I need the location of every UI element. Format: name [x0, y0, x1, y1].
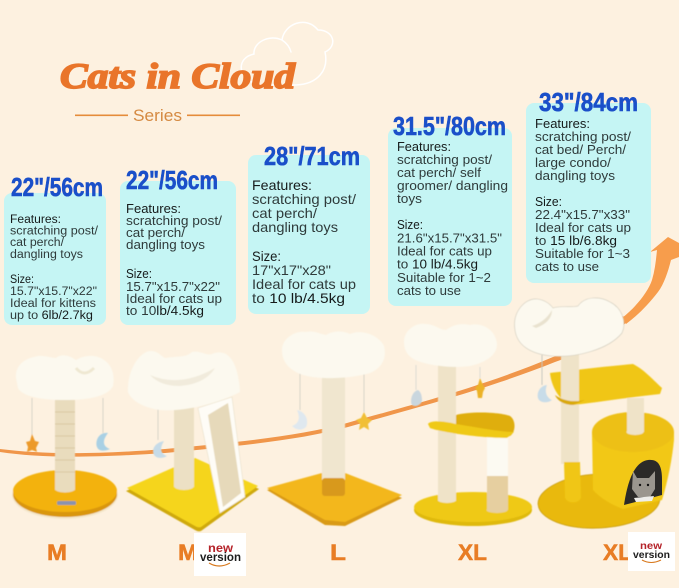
features and size text: toys [397, 192, 422, 206]
product: M round base cat tree [12, 355, 118, 519]
features and size text: 15.7"x15.7"x22" [126, 280, 220, 294]
heading: 22"/56cm [126, 165, 218, 195]
badge: new version: version [200, 552, 241, 564]
subtitle: series: Series [133, 106, 182, 125]
features and size text: Features: [10, 214, 61, 226]
icon: cloud outline behind title [241, 22, 333, 85]
features and size text: Ideal for cats up [397, 244, 492, 258]
size label: M: M [47, 540, 67, 565]
features and size text: Ideal for cats up [126, 292, 222, 306]
features and size text: Size: [535, 195, 562, 209]
features and size text: 21.6"x15.7"x31.5" [397, 232, 502, 246]
features and size text [397, 140, 508, 298]
features and size text: Suitable for 1~2 [397, 271, 491, 285]
size label: M with badge: M [178, 540, 198, 565]
features and size text: Features: [397, 140, 451, 154]
size label: XL: XL [458, 540, 487, 565]
features and size text: Features: [126, 202, 181, 216]
features and size text [10, 214, 99, 322]
growth arrow curve [0, 237, 679, 457]
product: XL condo cat tree [515, 298, 674, 531]
badge: new version: version [633, 549, 670, 561]
features and size text: cats to use [535, 260, 599, 274]
features and size text: dangling toys [10, 249, 83, 261]
heading: 31.5"/80cm [393, 111, 506, 141]
features and size text: cat perch/ [126, 226, 186, 240]
badge: new version: new [640, 540, 663, 552]
features and size text: dangling toys [126, 238, 205, 252]
features and size text: dangling toys [252, 219, 338, 235]
features and size text: Features: [535, 117, 590, 131]
features and size text: Size: [126, 267, 152, 281]
features and size text: to 10 lb/4.5kg [252, 290, 345, 306]
badge: new version [628, 532, 675, 571]
product: M square base cat tree with ramp [126, 351, 259, 531]
product: XL shelf cat tree [404, 324, 532, 526]
features and size text [535, 117, 632, 274]
icon: condo door with kitten [624, 460, 662, 505]
features and size text: scratching post/ [535, 130, 632, 144]
size label: L: L [330, 540, 346, 565]
features and size text: to 10lb/4.5kg [126, 304, 204, 318]
product: L square base cat tree [267, 331, 402, 526]
features and size text: cat perch/ self [397, 166, 482, 180]
size label: XL with badge: XL [603, 540, 632, 565]
features and size text [252, 177, 356, 306]
badge: new version [194, 533, 246, 576]
features and size text: large condo/ [535, 156, 612, 170]
features and size text: to 10 lb/4.5kg [397, 258, 478, 272]
features and size text: up to 6lb/2.7kg [10, 310, 93, 322]
features and size text: scratching post/ [10, 226, 99, 238]
features and size text: Suitable for 1~3 [535, 247, 630, 261]
title: Cats in Cloud [60, 56, 296, 96]
features and size text: cats to use [397, 284, 461, 298]
features and size text: groomer/ dangling [397, 179, 508, 193]
heading: 22"/56cm [11, 172, 103, 202]
panel: 28in L tree [248, 141, 370, 314]
features and size text: Ideal for cats up [535, 221, 631, 235]
panel: 31.5in XL tree [388, 111, 512, 306]
features and size text: Size: [10, 274, 34, 286]
features and size text: to 15 lb/6.8kg [535, 234, 617, 248]
features and size text: scratching post/ [397, 153, 493, 167]
panel: 33in XL tree [526, 87, 651, 283]
features and size text: scratching post/ [126, 214, 223, 228]
panel: 22in M ramp tree [120, 165, 236, 325]
features and size text: 22.4"x15.7"x33" [535, 208, 630, 222]
features and size text: Ideal for kittens [10, 298, 96, 310]
heading: 33"/84cm [539, 87, 638, 117]
features and size text: cat bed/ Perch/ [535, 143, 627, 157]
features and size text: cat perch/ [10, 237, 65, 249]
badge: new version: new [208, 543, 233, 555]
features and size text [126, 202, 223, 318]
features and size text: Features: [252, 177, 312, 193]
features and size text: scratching post/ [252, 191, 356, 207]
features and size text: Ideal for cats up [252, 276, 356, 292]
panel: 22in M kitten tree [4, 172, 106, 325]
features and size text: cat perch/ [252, 205, 317, 221]
features and size text: 17"x17"x28" [252, 262, 331, 278]
features and size text: Size: [252, 248, 281, 264]
features and size text: 15.7"x15.7"x22" [10, 286, 97, 298]
heading: 28"/71cm [264, 141, 360, 171]
features and size text: Size: [397, 218, 423, 232]
features and size text: dangling toys [535, 169, 615, 183]
